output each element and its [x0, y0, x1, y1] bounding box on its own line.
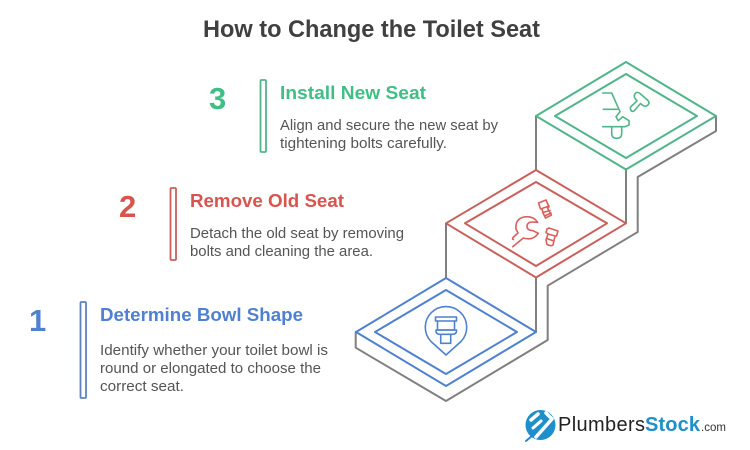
step 1 number: 1 [29, 303, 46, 338]
platform: blue bottom step [356, 278, 536, 386]
icon: wrench and bolts [512, 200, 558, 247]
logo icon [526, 410, 556, 441]
step 2 bar [170, 188, 176, 260]
step 1 description: Identify whether your toilet bowl is [100, 343, 328, 359]
logo wordmark: Plumbers [558, 414, 645, 436]
step 3 description: tightening bolts carefully. [280, 136, 447, 152]
logo: PlumbersStock.com: .com [701, 422, 726, 434]
icon: toilet in map pin [425, 307, 467, 355]
step 3 description [280, 118, 499, 152]
step 2: remove old seat [119, 188, 404, 260]
step 1 bar [80, 302, 86, 398]
step 3 number: 3 [209, 81, 226, 116]
step 1 description [100, 343, 328, 395]
platform: green top step [536, 62, 716, 170]
logo: PlumbersStock.com: Stock [645, 414, 701, 436]
step 1 description: round or elongated to choose the [100, 361, 321, 377]
step 3 heading: Install New Seat [280, 82, 426, 103]
staircase grey outline [356, 116, 716, 401]
step 1: determine bowl shape [29, 302, 328, 398]
logo: PlumbersStock.com [526, 410, 726, 441]
title: How to Change the Toilet Seat [203, 16, 540, 43]
step 2 description: bolts and cleaning the area. [190, 244, 373, 260]
step 2 description: Detach the old seat by removing [190, 226, 404, 242]
step 3 bar [260, 80, 266, 152]
step 3 description: Align and secure the new seat by [280, 118, 499, 134]
step 2 heading: Remove Old Seat [190, 190, 344, 211]
icon: seat and bolt [603, 92, 649, 138]
step 2 description [190, 226, 404, 260]
step 2 number: 2 [119, 189, 136, 224]
step 1 description: correct seat. [100, 379, 184, 395]
step 3: install new seat [209, 80, 499, 152]
step 1 heading: Determine Bowl Shape [100, 304, 303, 325]
platform: red middle step [446, 170, 626, 278]
